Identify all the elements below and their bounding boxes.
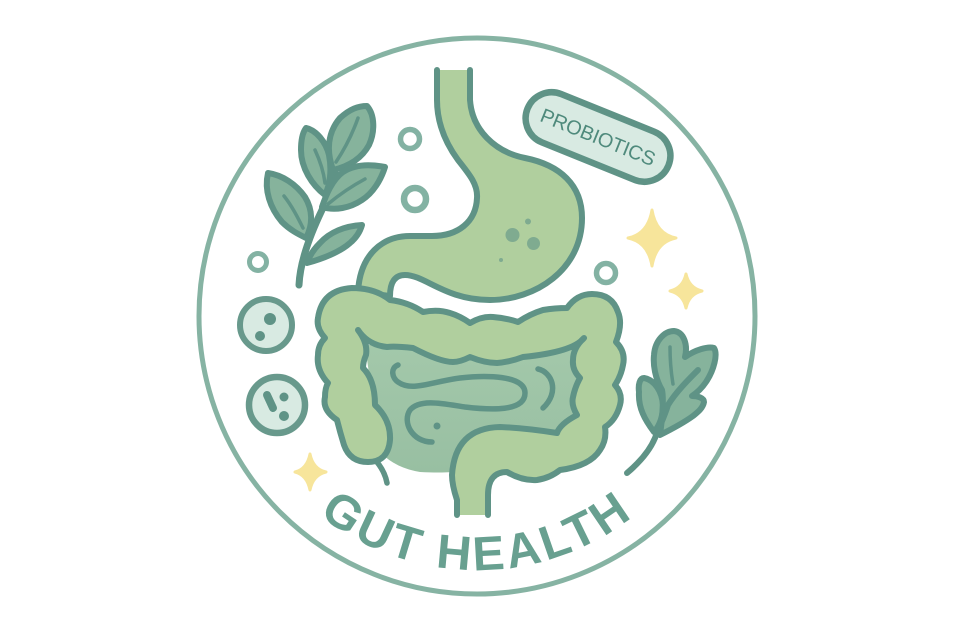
intestine dot bbox=[434, 422, 440, 430]
left leaf bbox=[267, 173, 311, 238]
bacteria cell one bbox=[240, 299, 292, 351]
medium sparkle bbox=[670, 274, 702, 308]
stomach spots bbox=[499, 218, 540, 262]
bubble right bbox=[596, 264, 616, 282]
bubble top bbox=[400, 130, 420, 148]
small intestine loop bbox=[393, 365, 525, 442]
left lobe bbox=[639, 378, 663, 432]
stomach outline bbox=[358, 70, 582, 300]
sprig stem bbox=[299, 172, 335, 285]
floating bubbles bbox=[250, 130, 616, 282]
appendix bbox=[377, 462, 387, 483]
stomach and esophagus bbox=[358, 70, 582, 300]
small sparkle bbox=[295, 454, 326, 490]
cell dots bbox=[255, 313, 276, 341]
right sprig veins bbox=[670, 347, 673, 384]
probiotics capsule bbox=[518, 84, 678, 190]
main leaf body bbox=[654, 331, 716, 435]
title: gut health: GUT HEALTH bbox=[326, 492, 630, 570]
capsule body bbox=[518, 84, 678, 190]
mesentery background bbox=[365, 345, 585, 472]
small intestine arc bbox=[538, 369, 553, 408]
cell marks bbox=[267, 392, 289, 421]
bacteria cell two bbox=[249, 377, 305, 433]
left leaf sprig bbox=[267, 106, 385, 285]
right sprig stem bbox=[627, 370, 698, 473]
lower leaf bbox=[307, 225, 362, 263]
upper left leaf bbox=[301, 128, 330, 195]
top leaf bbox=[329, 106, 373, 170]
leaf veins bbox=[284, 118, 365, 228]
bubble middle bbox=[404, 188, 426, 210]
badge outer ring bbox=[199, 38, 755, 594]
large intestine bbox=[318, 288, 624, 515]
bubble left bbox=[250, 254, 266, 270]
right leaf sprig bbox=[627, 331, 716, 473]
sparkles bbox=[295, 210, 702, 490]
cell body bbox=[249, 377, 305, 433]
right leaf bbox=[322, 165, 385, 209]
cell body bbox=[240, 299, 292, 351]
capsule label: PROBIOTICS bbox=[537, 105, 658, 171]
large sparkle bbox=[628, 210, 676, 266]
intestines bbox=[318, 288, 624, 515]
